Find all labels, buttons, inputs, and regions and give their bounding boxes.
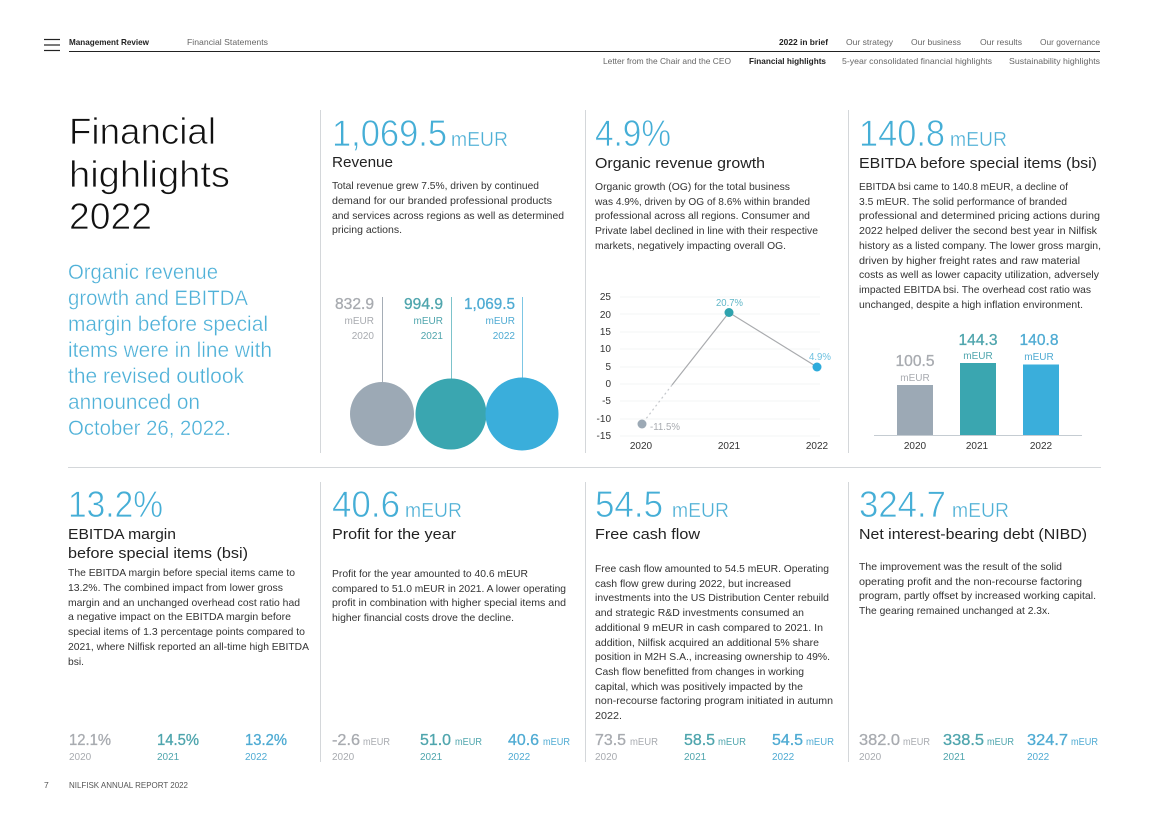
header navigation: Financial Statements — [187, 37, 268, 47]
NIBD figure: mEUR — [952, 500, 1009, 522]
EBITDA margin history — [69, 732, 287, 763]
EBITDA margin text: margin and an unchanged overhead cost ratio had — [68, 598, 300, 609]
bar chart — [874, 332, 1082, 452]
panel: profit for the year — [332, 484, 570, 763]
bar chart: mEUR — [900, 373, 930, 384]
organic growth text: Private label declined in line with their respective — [595, 226, 818, 237]
NIBD history: 2021 — [943, 752, 966, 763]
EBITDA margin heading: EBITDA margin — [68, 526, 176, 543]
EBITDA text: driven by higher freight rates and raw material — [859, 256, 1080, 267]
intro statement: growth and EBITDA — [68, 286, 249, 310]
free cash flow history: mEUR — [630, 737, 658, 748]
EBITDA margin heading — [68, 526, 248, 562]
revenue figure: mEUR — [451, 129, 508, 151]
EBITDA margin history: 14.5% — [157, 732, 199, 749]
revenue text: and services across regions as well as determined — [332, 211, 564, 222]
EBITDA margin history: 2022 — [245, 752, 268, 763]
EBITDA margin text: The EBITDA margin before special items came to — [68, 568, 295, 579]
EBITDA text: 2022 helped deliver the second best year in Nilfisk — [859, 226, 1098, 237]
revenue bubble chart: mEUR — [345, 316, 374, 327]
footer: NILFISK ANNUAL REPORT 2022 — [69, 780, 188, 790]
organic growth text: Organic growth (OG) for the total business — [595, 182, 790, 193]
revenue text: Total revenue grew 7.5%, driven by continued — [332, 181, 539, 192]
NIBD figure: 324.7 — [859, 484, 946, 525]
EBITDA margin text: 2021, where Nilfisk reported an all-time high EBITDA — [68, 642, 309, 653]
free cash flow figure — [595, 484, 729, 525]
free cash flow history: 2022 — [772, 752, 795, 763]
EBITDA margin history: 2021 — [157, 752, 180, 763]
revenue heading: Revenue — [332, 154, 393, 171]
free cash flow history — [595, 732, 834, 763]
bar chart: mEUR — [963, 351, 993, 362]
line chart — [597, 292, 831, 452]
revenue bubble chart: 2022 — [493, 331, 515, 342]
free cash flow text: addition, Nilfisk acquired an additional 5% share — [595, 638, 819, 649]
icon: menu — [44, 40, 60, 50]
bar chart: mEUR — [1024, 352, 1054, 363]
line chart: 20.7% — [716, 297, 743, 309]
revenue bubble chart — [335, 296, 558, 450]
NIBD history: mEUR — [987, 737, 1014, 748]
EBITDA text: EBITDA bsi came to 140.8 mEUR, a decline of — [859, 182, 1068, 193]
organic growth figure: 4.9% — [595, 113, 671, 154]
intro statement: October 26, 2022. — [68, 416, 231, 440]
profit history: 2022 — [508, 752, 531, 763]
free cash flow history: 58.5 — [684, 732, 715, 749]
header navigation: Sustainability highlights — [1009, 56, 1100, 66]
revenue bubble chart: mEUR — [486, 316, 515, 327]
bar chart: 2020 — [904, 441, 927, 452]
free cash flow text — [595, 564, 833, 722]
NIBD history: 2020 — [859, 752, 882, 763]
profit history: mEUR — [543, 737, 570, 748]
organic growth text: markets, negatively impacting overall OG. — [595, 241, 786, 252]
line chart: -15 — [597, 431, 611, 442]
intro statement: announced on — [68, 390, 200, 414]
EBITDA margin history: 13.2% — [245, 732, 287, 749]
NIBD history: 338.5 — [943, 732, 984, 749]
title — [69, 110, 230, 237]
free cash flow figure: mEUR — [672, 500, 729, 522]
NIBD figure — [859, 484, 1009, 525]
intro statement: items were in line with — [68, 338, 272, 362]
revenue text — [332, 181, 564, 236]
free cash flow history: 2020 — [595, 752, 618, 763]
revenue figure: 1,069.5 — [332, 113, 447, 154]
panel: revenue — [332, 113, 564, 450]
free cash flow history: 54.5 — [772, 732, 803, 749]
organic growth text — [594, 182, 818, 252]
intro statement: the revised outlook — [68, 364, 244, 388]
free cash flow text: Cash flow benefitted from changes in working — [595, 667, 804, 678]
bar chart: 144.3 — [958, 332, 998, 349]
NIBD heading: Net interest-bearing debt (NIBD) — [859, 526, 1087, 543]
bar chart: 2022 — [1030, 441, 1053, 452]
header navigation: Management Review — [69, 37, 149, 47]
NIBD history: 2022 — [1027, 752, 1050, 763]
line chart: -10 — [597, 414, 611, 425]
line chart: -11.5% — [650, 421, 680, 433]
profit figure — [332, 484, 462, 525]
profit text: higher financial costs drove the decline. — [332, 613, 514, 624]
free cash flow text: capital, which was positively impacted by the — [595, 682, 803, 693]
EBITDA margin text: a negative impact on the EBITDA margin before — [68, 612, 291, 623]
revenue bubble chart: 832.9 — [335, 296, 374, 313]
EBITDA text: 3.5 mEUR. The solid performance of branded — [859, 197, 1067, 208]
profit figure: 40.6 — [332, 484, 400, 525]
header navigation: 2022 in brief — [779, 37, 828, 47]
NIBD history: 324.7 — [1027, 732, 1068, 749]
profit text — [332, 569, 566, 624]
revenue bubble chart: 1,069.5 — [464, 296, 515, 313]
title: Financial — [69, 110, 216, 152]
EBITDA figure: mEUR — [950, 129, 1007, 151]
line chart: 0 — [605, 379, 611, 390]
free cash flow text: non-recourse factoring program initiated in autumn — [595, 696, 833, 707]
NIBD text: The gearing remained unchanged at 2.3x. — [859, 606, 1050, 617]
line chart: 5 — [605, 362, 611, 373]
line chart: 4.9% — [809, 351, 831, 363]
profit history: mEUR — [363, 737, 390, 748]
profit text: compared to 51.0 mEUR in 2021. A lower operating — [332, 584, 566, 595]
title: highlights — [69, 153, 230, 195]
header navigation: Our results — [980, 37, 1022, 47]
header navigation: 5-year consolidated financial highlights — [842, 56, 992, 66]
profit history: mEUR — [455, 737, 482, 748]
NIBD history: mEUR — [1071, 737, 1098, 748]
line chart: -5 — [602, 396, 611, 407]
free cash flow text: Free cash flow amounted to 54.5 mEUR. Operating — [595, 564, 829, 575]
bar chart: 100.5 — [896, 353, 934, 370]
NIBD text — [859, 562, 1096, 617]
line chart: 25 — [600, 292, 611, 303]
line chart: 15 — [600, 327, 611, 338]
profit text: profit in combination with higher special items and — [332, 598, 566, 609]
bar chart: 140.8 — [1020, 332, 1058, 349]
free cash flow text: additional 9 mEUR in cash compared to 2021. In — [595, 623, 823, 634]
EBITDA margin text: bsi. — [68, 657, 84, 668]
EBITDA margin figure: 13.2% — [68, 484, 163, 525]
EBITDA margin heading: before special items (bsi) — [68, 545, 248, 562]
EBITDA text: costs as well as lower capacity utilization, adversely — [859, 270, 1100, 281]
EBITDA text: professional and determined pricing actions during — [859, 211, 1100, 222]
bar chart: 2021 — [966, 441, 989, 452]
panel: net interest-bearing debt — [859, 484, 1098, 763]
free cash flow text: 2022. — [595, 711, 622, 722]
profit history: 51.0 — [420, 732, 451, 749]
EBITDA text: unchanged, despite a high inflation environment. — [859, 300, 1083, 311]
EBITDA figure: 140.8 — [859, 113, 945, 154]
panel: EBITDA margin — [68, 484, 309, 763]
revenue bubble chart: 2020 — [352, 331, 374, 342]
header navigation: Letter from the Chair and the CEO — [603, 56, 731, 66]
revenue bubble chart: mEUR — [414, 316, 443, 327]
EBITDA margin history: 2020 — [69, 752, 92, 763]
NIBD text: The improvement was the result of the solid — [859, 562, 1062, 573]
EBITDA figure — [859, 113, 1007, 154]
profit heading: Profit for the year — [332, 526, 456, 543]
free cash flow text: and strategic R&D investments consumed an — [595, 608, 804, 619]
profit figure: mEUR — [405, 500, 462, 522]
profit history: 40.6 — [508, 732, 539, 749]
EBITDA margin history: 12.1% — [69, 732, 111, 749]
title: 2022 — [69, 195, 152, 237]
header navigation — [44, 37, 1100, 66]
panel: free cash flow — [595, 484, 834, 763]
EBITDA text: impacted EBITDA bsi. The overhead cost ratio was — [859, 285, 1091, 296]
intro statement: Organic revenue — [68, 260, 218, 284]
NIBD history: 382.0 — [859, 732, 900, 749]
free cash flow figure: 54.5 — [595, 484, 663, 525]
footer: 7 — [44, 780, 49, 790]
free cash flow text: cash flow grew during 2022, but increased — [595, 579, 791, 590]
revenue bubble chart: 2021 — [421, 331, 443, 342]
profit text: Profit for the year amounted to 40.6 mEUR — [332, 569, 528, 580]
organic growth text: was 4.9%, driven by OG of 8.6% within branded — [594, 197, 810, 208]
NIBD text: program, partly offset by increased working capital. — [859, 591, 1096, 602]
NIBD history: mEUR — [903, 737, 930, 748]
line chart: 2022 — [806, 441, 829, 452]
revenue bubble chart: 994.9 — [404, 296, 443, 313]
profit history: 2020 — [332, 752, 355, 763]
panel: EBITDA before special items — [859, 113, 1101, 452]
intro statement — [68, 260, 272, 440]
NIBD text: operating profit and the non-recourse factoring — [859, 577, 1082, 588]
revenue text: pricing actions. — [332, 225, 402, 236]
header navigation: Our governance — [1040, 37, 1100, 47]
NIBD history — [859, 732, 1098, 763]
panel: organic revenue growth — [594, 113, 831, 452]
organic growth text: professional across all regions. Consumer and — [595, 211, 810, 222]
header navigation: Financial highlights — [749, 56, 826, 66]
line chart: 2021 — [718, 441, 741, 452]
free cash flow text: position in M2H S.A., increasing ownership to 49%. — [595, 652, 830, 663]
line chart: 20 — [600, 310, 611, 321]
free cash flow history: 2021 — [684, 752, 707, 763]
free cash flow text: investments into the US Distribution Center rebuild — [595, 593, 829, 604]
EBITDA text — [859, 182, 1101, 311]
EBITDA margin text: 13.2%. The combined impact from lower gross — [68, 583, 283, 594]
header navigation: Our business — [911, 37, 961, 47]
profit history: 2021 — [420, 752, 443, 763]
profit history — [332, 732, 570, 763]
free cash flow history: 73.5 — [595, 732, 626, 749]
profit history: -2.6 — [332, 732, 360, 749]
intro statement: margin before special — [68, 312, 268, 336]
revenue text: demand for our branded professional products — [332, 196, 552, 207]
line chart: 10 — [600, 344, 611, 355]
EBITDA margin text: special items of 1.3 percentage points compared to — [68, 627, 305, 638]
free cash flow history: mEUR — [806, 737, 834, 748]
EBITDA margin text — [68, 568, 309, 668]
EBITDA heading: EBITDA before special items (bsi) — [859, 155, 1097, 172]
organic growth heading: Organic revenue growth — [595, 155, 765, 172]
free cash flow heading: Free cash flow — [595, 526, 700, 543]
header navigation: Our strategy — [846, 37, 894, 47]
EBITDA text: history as a listed company. The lower gross margin, — [859, 241, 1101, 252]
free cash flow history: mEUR — [718, 737, 746, 748]
line chart: 2020 — [630, 441, 653, 452]
